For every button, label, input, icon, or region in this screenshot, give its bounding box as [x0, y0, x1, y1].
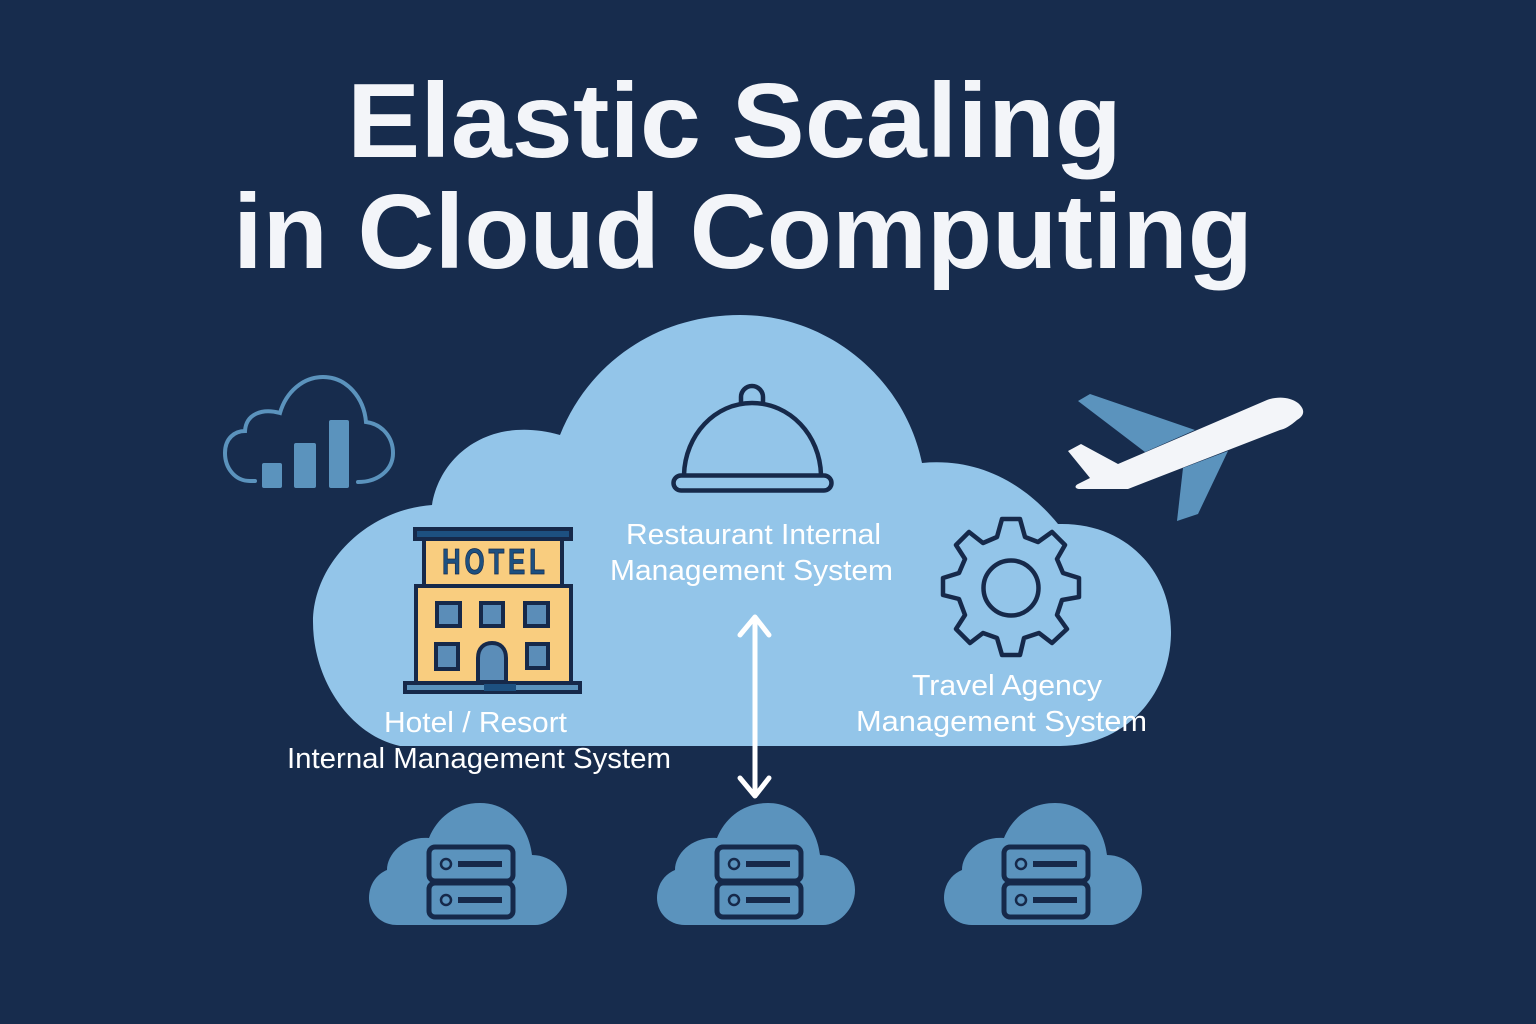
icon: hotel building: [405, 529, 580, 692]
hotel sign text: HOTEL: [442, 542, 545, 582]
label: restaurant system: [610, 519, 893, 587]
main cloud: [313, 315, 1171, 746]
server cloud 3: [944, 803, 1142, 925]
icon: cloud with bar chart: [225, 377, 393, 488]
label: hotel system: Internal Management System: [287, 743, 671, 775]
icon: gear: [943, 519, 1079, 655]
label: travel agency system: Travel Agency: [912, 670, 1103, 702]
label: restaurant system: Management System: [610, 555, 893, 587]
icon: airplane: [1068, 394, 1303, 521]
label: travel agency system: Management System: [856, 706, 1147, 738]
label: travel agency system: [856, 670, 1147, 738]
server cloud 2: [657, 803, 855, 925]
icon: restaurant cloche: [674, 386, 832, 490]
title: [233, 62, 1253, 291]
label: hotel system: [287, 707, 671, 775]
label: restaurant system: Restaurant Internal: [626, 519, 881, 551]
server cloud 1: [369, 803, 567, 925]
label: hotel system: Hotel / Resort: [384, 707, 567, 739]
title: in Cloud Computing: [233, 173, 1253, 291]
arrow: two-way scaling: [740, 617, 769, 796]
title: Elastic Scaling: [347, 62, 1122, 180]
